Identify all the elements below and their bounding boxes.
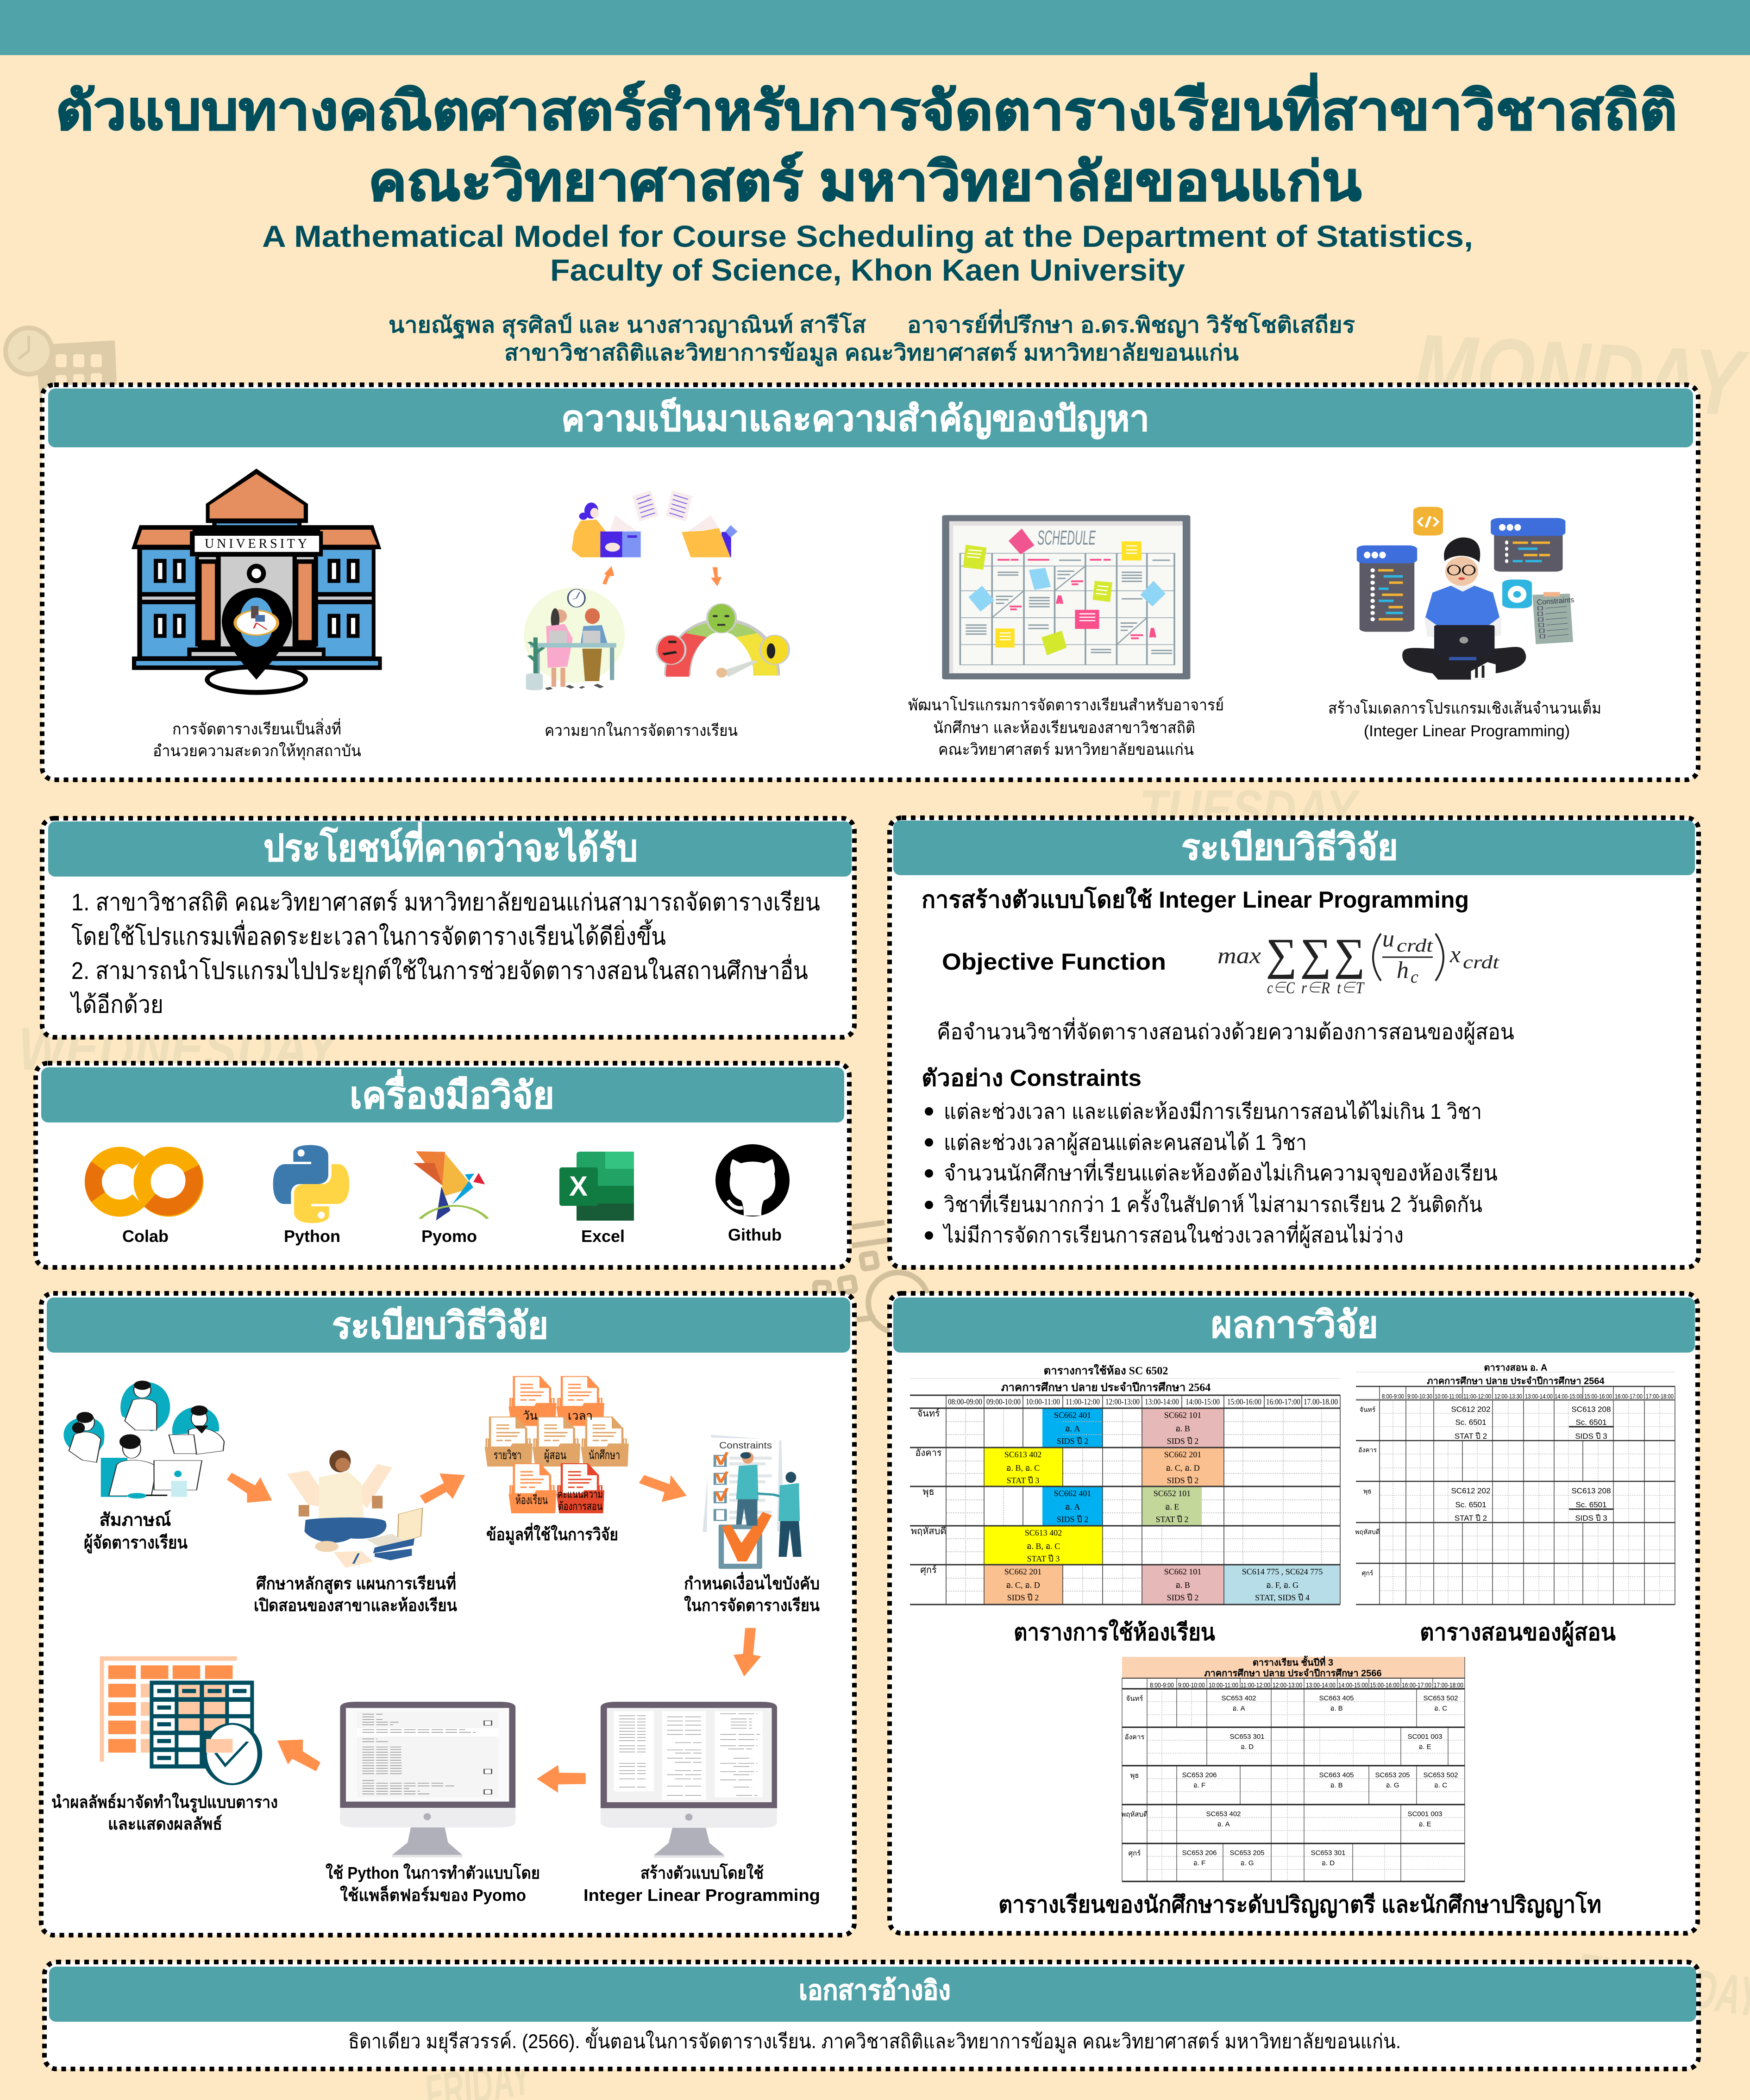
icon: schedule board: SCHEDULE [1037, 527, 1096, 549]
label: study curriculum [254, 1572, 457, 1615]
label: results display: และแสดงผลลัพธ์ [108, 1814, 222, 1833]
caption: integer linear programming: (Integer Linear Programming) [1364, 722, 1570, 740]
label: Colab: Colab [122, 1227, 169, 1246]
text: benefits list [69, 889, 820, 1018]
table: student timetable: 9:00-10:00 [1178, 1681, 1205, 1689]
table: room usage: SIDS ปี 2 [1167, 1593, 1198, 1602]
list: constraints: วิชาที่เรียนมากกว่า 1 ครั้งในสัปดาห์ ไม่สามารถเรียน 2 วันติดกัน [944, 1189, 1482, 1216]
english subtitle: A Mathematical Model for Course Scheduling at the Department of Statistics, [262, 219, 1473, 253]
caption: room usage: ตารางการใช้ห้องเรียน [1014, 1619, 1215, 1645]
table: room usage: SC662 101 [1164, 1567, 1201, 1576]
label: Github: Github [728, 1225, 782, 1244]
table: student timetable: 12:00-13:00 [1273, 1681, 1302, 1689]
table: instructor timetable: พุธ [1363, 1487, 1372, 1495]
authors and affiliation [389, 309, 1355, 367]
table: room usage: SIDS ปี 2 [1057, 1436, 1088, 1446]
table: student timetable: ตารางเรียน ชั้นปีที่ 3 [1253, 1655, 1333, 1668]
label: constraints: ในการจัดตารางเรียน [684, 1595, 820, 1615]
table: student timetable: SC001 003 [1407, 1810, 1443, 1818]
table: instructor timetable: 8:00-9:00 [1382, 1392, 1404, 1400]
table: student timetable: SC653 402 [1206, 1810, 1241, 1818]
formula: crdt [1397, 935, 1433, 956]
icon: scheduling difficulty [524, 490, 789, 690]
table: room usage: อ. B [1175, 1580, 1190, 1590]
table: room usage: อ. B, อ. C [1027, 1542, 1060, 1551]
table: instructor timetable: SIDS ปี 3 [1575, 1514, 1607, 1523]
text: objective explanation: คือจำนวนวิชาที่จัดตารางสอนถ่วงด้วยความต้องการสอนของผู้สอน [937, 1017, 1514, 1045]
heading: references: เอกสารอ้างอิง [799, 1975, 951, 2006]
table: room usage: อ. A [1065, 1424, 1080, 1433]
table: student timetable: 15:00-16:00 [1370, 1681, 1399, 1689]
table: room usage: 16:00-17:00 [1266, 1397, 1300, 1406]
table: instructor timetable: 17:00-18:00 [1646, 1392, 1674, 1400]
table: student timetable: ศุกร์ [1129, 1849, 1141, 1858]
table: student timetable: อ. A [1217, 1820, 1230, 1828]
caption: schedule: คณะวิทยาศาสตร์ มหาวิทยาลัยขอนแก่น [938, 741, 1194, 759]
text: benefits list: 1. สาขาวิชาสถิติ คณะวิทยาศาสตร์ มหาวิทยาลัยขอนแก่นสามารถจัดตารางเรียน [71, 889, 820, 916]
label: python and pyomo [326, 1863, 540, 1905]
table: student timetable: 17:00-18:00 [1434, 1681, 1463, 1689]
table: room usage: ตารางการใช้ห้อง SC 6502 [1044, 1364, 1168, 1377]
table: student timetable: อ. G [1240, 1859, 1254, 1867]
caption: integer linear programming: สร้างโมเดลการโปรแกรมเชิงเส้นจำนวนเต็ม [1328, 699, 1601, 717]
table: instructor timetable: 9:00-10:30 [1407, 1392, 1432, 1400]
table: student timetable: SC001 003 [1407, 1733, 1443, 1741]
icon: monitor with ILP model [601, 1702, 777, 1858]
table: room usage [910, 1364, 1340, 1605]
table: room usage: SC613 402 [1025, 1528, 1062, 1537]
table: room usage: พฤหัสบดี [911, 1526, 946, 1536]
table: student timetable: 8:00-9:00 [1150, 1681, 1174, 1689]
table: room usage: STAT ปี 3 [1007, 1476, 1039, 1485]
table: student timetable: SC653 205 [1375, 1771, 1410, 1779]
panel: research results [890, 1293, 1698, 1933]
icon: Pyomo [413, 1151, 488, 1221]
text: benefits list: ได้อีกด้วย [69, 991, 163, 1018]
table: instructor timetable: 10:00-11:00 [1435, 1392, 1461, 1400]
table: instructor timetable: 14:00-15:00 [1555, 1392, 1582, 1400]
table: room usage: 11:00-12:00 [1066, 1397, 1100, 1406]
table: student timetable: 11:00-12:00 [1241, 1681, 1270, 1689]
icon: university building: UNIVERSITY [205, 537, 307, 551]
formula: h [1397, 957, 1409, 984]
table: instructor timetable: 13:00-14:00 [1525, 1392, 1553, 1400]
authors and affiliation: สาขาวิชาสถิติและวิทยาการข้อมูล คณะวิทยาศาสตร์ มหาวิทยาลัยขอนแก่น [504, 340, 1239, 367]
icon: Excel: X [569, 1171, 588, 1202]
table: student timetable: อ. A [1232, 1705, 1245, 1712]
table: room usage: อ. E [1165, 1502, 1179, 1511]
label: build model: Integer Linear Programming [583, 1886, 820, 1905]
table: instructor timetable: STAT ปี 2 [1455, 1432, 1487, 1441]
list: constraints: จำนวนนักศึกษาที่เรียนแต่ละห้องต้องไม่เกินความจุของห้องเรียน [944, 1158, 1498, 1186]
label: results display: นำผลลัพธ์มาจัดทำในรูปแบบตาราง [51, 1792, 278, 1813]
table: room usage: 14:00-15:00 [1185, 1397, 1220, 1406]
formula: r∈R [1301, 978, 1330, 997]
table: student timetable: อ. G [1386, 1781, 1399, 1789]
table: instructor timetable: ตารางสอน อ. A [1484, 1363, 1547, 1373]
icon: university building [132, 469, 382, 695]
table: instructor timetable: Sc. 6501 [1455, 1418, 1487, 1427]
heading: background: ความเป็นมาและความสำคัญของปัญหา [561, 397, 1149, 439]
table: student timetable: อ. C [1434, 1781, 1447, 1789]
table: room usage: 15:00-16:00 [1227, 1397, 1261, 1406]
table: room usage: อ. C, อ. D [1006, 1580, 1040, 1590]
table: student timetable: อังคาร [1125, 1733, 1144, 1741]
formula: c∈C [1267, 978, 1295, 997]
label: interview: ผู้จัดตารางเรียน [84, 1533, 188, 1554]
label: interview [84, 1510, 188, 1554]
table: room usage: 10:00-11:00 [1026, 1397, 1060, 1406]
icon: data folders: ห้องเรียน [515, 1493, 548, 1507]
icon: data folders: นักศึกษา [589, 1448, 620, 1462]
formula: ∑ [1334, 929, 1365, 979]
table: room usage: SIDS ปี 2 [1167, 1476, 1198, 1485]
title: ตัวแบบทางคณิตศาสตร์สำหรับการจัดตารางเรียนที่สาขาวิชาสถิติ [56, 73, 1677, 141]
table: instructor timetable: Sc. 6501 [1575, 1500, 1607, 1509]
table: room usage: อ. C, อ. D [1166, 1463, 1200, 1473]
title: คณะวิทยาศาสตร์ มหาวิทยาลัยขอนแก่น [368, 151, 1361, 212]
table: room usage: SC662 101 [1164, 1410, 1201, 1420]
icon: schedule board [942, 515, 1190, 679]
formula: t∈T [1337, 978, 1365, 997]
table: room usage: SC662 201 [1004, 1567, 1041, 1576]
icon: data folders: รายวิชา [494, 1448, 521, 1462]
table: instructor timetable: ศุกร์ [1362, 1569, 1374, 1577]
list: constraints: แต่ละช่วงเวลา และแต่ละห้องมีการเรียนการสอนได้ไม่เกิน 1 วิชา [944, 1099, 1482, 1123]
table: student timetable: SC653 502 [1423, 1694, 1458, 1702]
table: room usage: อังคาร [915, 1448, 942, 1458]
table: room usage: SC613 402 [1004, 1450, 1041, 1459]
table: room usage: อ. B, อ. C [1006, 1463, 1040, 1473]
table: student timetable: SC653 301 [1311, 1849, 1346, 1857]
list: constraints: แต่ละช่วงเวลาผู้สอนแต่ละคนสอนได้ 1 วิชา [944, 1130, 1307, 1155]
caption: schedule [908, 696, 1224, 759]
arrow 3 [639, 1475, 687, 1502]
table: instructor timetable: SIDS ปี 3 [1575, 1432, 1607, 1441]
label: study curriculum: ศึกษาหลักสูตร แผนการเรียนที่ [256, 1572, 456, 1594]
table: student timetable: ภาคการศึกษา ปลาย ประจำปีการศึกษา 2566 [1204, 1668, 1382, 1679]
formula: ∑ [1266, 929, 1297, 979]
table: room usage: SC662 401 [1054, 1489, 1091, 1498]
heading: benefits: ประโยชน์ที่คาดว่าจะได้รับ [263, 822, 638, 869]
table: room usage: STAT ปี 2 [1156, 1515, 1188, 1524]
table: room usage: อ. B [1175, 1424, 1190, 1433]
title [56, 73, 1677, 212]
table: instructor timetable: Sc. 6501 [1455, 1500, 1487, 1509]
subheading: constraints: ตัวอย่าง Constraints [922, 1065, 1142, 1091]
table: room usage: 13:00-14:00 [1145, 1397, 1179, 1406]
text: benefits list: โดยใช้โปรแกรมเพื่อลดระยะเวลาในการจัดตารางเรียนได้ดียิ่งขึ้น [71, 919, 666, 950]
table: room usage: SC614 775 , SC624 775 [1242, 1567, 1323, 1576]
table: instructor timetable: 16:00-17:00 [1615, 1392, 1643, 1400]
table: student timetable: จันทร์ [1126, 1695, 1143, 1703]
table: room usage: SC662 401 [1054, 1410, 1091, 1420]
label: Excel: Excel [581, 1227, 625, 1246]
table: room usage: อ. F, อ. G [1266, 1580, 1298, 1590]
subheading: ILP: การสร้างตัวแบบโดยใช้ Integer Linear Programming [922, 886, 1469, 913]
icon: data folders: ต้องการสอน [558, 1500, 602, 1513]
icon: data folders [485, 1376, 629, 1513]
table: instructor timetable: SC612 202 [1451, 1405, 1491, 1414]
heading: tools: เครื่องมือวิจัย [350, 1069, 554, 1116]
table: room usage: SIDS ปี 2 [1007, 1593, 1039, 1602]
icon: constraints checklist [703, 1435, 802, 1569]
caption: university [153, 718, 361, 760]
panel: methodology formula [890, 818, 1699, 1267]
table: room usage: 09:00-10:00 [986, 1397, 1021, 1406]
label: constraints [684, 1572, 820, 1615]
icon: programmer [1357, 507, 1574, 680]
formula: crdt [1463, 952, 1499, 972]
icon: Excel [559, 1152, 634, 1221]
formula: x [1449, 941, 1461, 968]
table: instructor timetable: พฤหัสบดี [1355, 1528, 1380, 1536]
table: instructor timetable [1355, 1363, 1675, 1605]
table: instructor timetable: จันทร์ [1360, 1406, 1376, 1413]
arrow 4 [734, 1628, 761, 1677]
panel: expected benefits [42, 818, 854, 1037]
background watermarks: WEDNESDAY [19, 1015, 342, 1083]
icon: monitor with python code [340, 1702, 515, 1857]
icon: data folders: เวลา [568, 1409, 593, 1423]
table: room usage: ศุกร์ [920, 1565, 937, 1576]
table: student timetable: SC653 205 [1229, 1849, 1265, 1857]
table: student timetable [1121, 1655, 1465, 1881]
table: instructor timetable: ภาคการศึกษา ปลาย ประจำปีการศึกษา 2564 [1427, 1376, 1605, 1386]
table: room usage: SC652 101 [1154, 1489, 1191, 1498]
table: student timetable: SC653 206 [1182, 1849, 1217, 1857]
text: citation: ธิดาเดียว มยุรีสวรรค์. (2566). ขั้นตอนในการจัดตารางเรียน. ภาควิชาสถิติและวิทยาการข้อมูล คณะวิทยาศาสตร์ มหาวิทยาลัยขอนแก่น. [348, 2027, 1401, 2054]
label: interview: สัมภาษณ์ [100, 1510, 171, 1530]
label: python and pyomo: ใช้ Python ในการทำตัวแบบโดย [326, 1863, 540, 1882]
icon: data folders: วัน [523, 1409, 538, 1423]
formula: u [1382, 926, 1394, 952]
label: build model: สร้างตัวแบบโดยใช้ [640, 1863, 764, 1882]
table: student timetable: SC653 206 [1182, 1771, 1217, 1779]
caption: difficulty: ความยากในการจัดตารางเรียน [545, 721, 738, 740]
table: room usage: STAT ปี 3 [1027, 1554, 1060, 1563]
heading: methodology flow: ระเบียบวิธีวิจัย [332, 1305, 548, 1346]
table: room usage: SIDS ปี 2 [1057, 1515, 1088, 1524]
table: student timetable: อ. B [1330, 1781, 1343, 1789]
table: room usage: พุธ [922, 1487, 935, 1498]
table: student timetable: 16:00-17:00 [1402, 1681, 1431, 1689]
table: room usage: STAT, SIDS ปี 4 [1255, 1593, 1310, 1602]
table: room usage: 12:00-13:00 [1105, 1397, 1140, 1406]
table: student timetable: 13:00-14:00 [1306, 1681, 1336, 1689]
formula: c [1411, 967, 1418, 987]
table: student timetable: SC663 405 [1319, 1694, 1354, 1702]
caption: university: การจัดตารางเรียนเป็นสิ่งที่ [172, 718, 341, 738]
formula [1217, 926, 1499, 997]
english subtitle: Faculty of Science, Khon Kaen University [550, 253, 1185, 287]
table: student timetable: อ. E [1418, 1743, 1431, 1751]
panel: research tools [36, 1063, 849, 1267]
table: room usage: 08:00-09:00 [948, 1397, 982, 1406]
table: student timetable: SC653 402 [1221, 1694, 1256, 1702]
table: student timetable: อ. F [1193, 1859, 1205, 1867]
table: student timetable: อ. D [1241, 1743, 1254, 1751]
table: student timetable: อ. F [1193, 1781, 1205, 1789]
table: instructor timetable: 15:00-16:00 [1584, 1392, 1612, 1400]
caption: integer linear programming [1328, 699, 1601, 740]
icon: data folders: ผู้สอน [544, 1448, 566, 1462]
table: student timetable: พุธ [1130, 1772, 1139, 1780]
table: instructor timetable: SC612 202 [1451, 1486, 1491, 1495]
icon: Colab [93, 1155, 195, 1208]
table: instructor timetable: SC613 208 [1571, 1405, 1611, 1414]
table: room usage: SIDS ปี 2 [1167, 1436, 1198, 1446]
table: instructor timetable: 12:00-13:30 [1494, 1392, 1522, 1400]
label: constraints: กำหนดเงื่อนไขบังคับ [684, 1572, 820, 1593]
table: student timetable: อ. C [1434, 1705, 1447, 1712]
heading: methodology: ระเบียบวิธีวิจัย [1181, 828, 1398, 867]
table: student timetable: อ. E [1418, 1820, 1431, 1828]
table: instructor timetable: Sc. 6501 [1575, 1418, 1607, 1427]
background watermarks: TUESDAY [1139, 779, 1361, 841]
heading: results: ผลการวิจัย [1211, 1304, 1378, 1345]
table: room usage: อ. A [1065, 1502, 1080, 1511]
table: student timetable: อ. B [1330, 1705, 1343, 1712]
table: student timetable: SC653 502 [1423, 1771, 1458, 1779]
table: student timetable: 10:00-11:00 [1209, 1681, 1238, 1689]
table: room usage: SC662 201 [1164, 1450, 1201, 1459]
label: Pyomo: Pyomo [421, 1227, 477, 1246]
arrow 1 [227, 1473, 272, 1503]
label: Python: Python [284, 1227, 340, 1246]
table: room usage: จันทร์ [917, 1408, 940, 1419]
english subtitle [262, 219, 1473, 287]
icon: studying person [287, 1450, 422, 1568]
table: room usage: 17.00-18.00 [1304, 1397, 1338, 1406]
panel: references [44, 1962, 1699, 2069]
table: student timetable: SC663 405 [1319, 1771, 1354, 1779]
caption: instructor timetable: ตารางสอนของผู้สอน [1420, 1619, 1616, 1647]
label: study curriculum: เปิดสอนของสาขาและห้องเรียน [254, 1596, 457, 1615]
icon: programmer: Constraints [1537, 596, 1574, 607]
list: constraints [925, 1099, 1498, 1248]
arrow 6 [277, 1740, 320, 1771]
icon: results table [100, 1656, 260, 1784]
panel: background and importance [42, 385, 1698, 780]
icon: GitHub [715, 1144, 790, 1216]
icon: constraints checklist: Constraints [719, 1441, 772, 1451]
panel: methodology flow [41, 1293, 854, 1935]
icon: data folders: คะแนนความ [558, 1488, 603, 1501]
caption: student timetable: ตารางเรียนของนักศึกษาระดับปริญญาตรี และนักศึกษาปริญญาโท [998, 1891, 1601, 1918]
table: student timetable: SC653 301 [1229, 1733, 1265, 1741]
label: python and pyomo: ใช้แพล็ตฟอร์มของ Pyomo [340, 1885, 526, 1905]
arrow 5 [537, 1765, 586, 1793]
caption: schedule: นักศึกษา และห้องเรียนของสาขาวิชาสถิติ [933, 719, 1195, 737]
caption: schedule: พัฒนาโปรแกรมการจัดตารางเรียนสำหรับอาจารย์ [908, 696, 1224, 714]
label: research data: ข้อมูลที่ใช้ในการวิจัย [486, 1523, 618, 1545]
label: results display [51, 1792, 278, 1833]
text: benefits list: 2. สามารถนำโปรแกรมไปประยุกต์ใช้ในการช่วยจัดตารางสอนในสถานศึกษาอื่น [71, 954, 808, 985]
authors and affiliation: นายณัฐพล สุรศิลป์ และ นางสาวญาณินท์ สารีโส [389, 312, 866, 339]
caption: university: อำนวยความสะดวกให้ทุกสถาบัน [153, 742, 361, 760]
authors and affiliation: อาจารย์ที่ปรึกษา อ.ดร.พิชญา วิรัชโชติเสถียร [907, 309, 1355, 338]
table: student timetable: พฤหัสบดี [1121, 1811, 1148, 1818]
list: constraints: ไม่มีการจัดการเรียนการสอนในช่วงเวลาที่ผู้สอนไม่ว่าง [942, 1220, 1404, 1248]
label: build model [583, 1863, 820, 1905]
table: student timetable: อ. D [1322, 1859, 1335, 1867]
label: objective function: Objective Function [942, 949, 1166, 975]
table: instructor timetable: อังคาร [1358, 1446, 1377, 1454]
icon: Python [273, 1145, 349, 1223]
formula: max [1217, 942, 1261, 968]
table: room usage: ภาคการศึกษา ปลาย ประจำปีการศึกษา 2564 [1001, 1381, 1211, 1394]
table: instructor timetable: SC613 208 [1571, 1486, 1611, 1495]
table: instructor timetable: STAT ปี 2 [1455, 1514, 1487, 1523]
arrow 2 [420, 1473, 465, 1504]
formula: ∑ [1300, 929, 1331, 979]
table: instructor timetable: 11:00-12:00 [1463, 1392, 1491, 1400]
icon: interview people [63, 1380, 224, 1498]
table: student timetable: 14:00-15:00 [1338, 1681, 1368, 1689]
